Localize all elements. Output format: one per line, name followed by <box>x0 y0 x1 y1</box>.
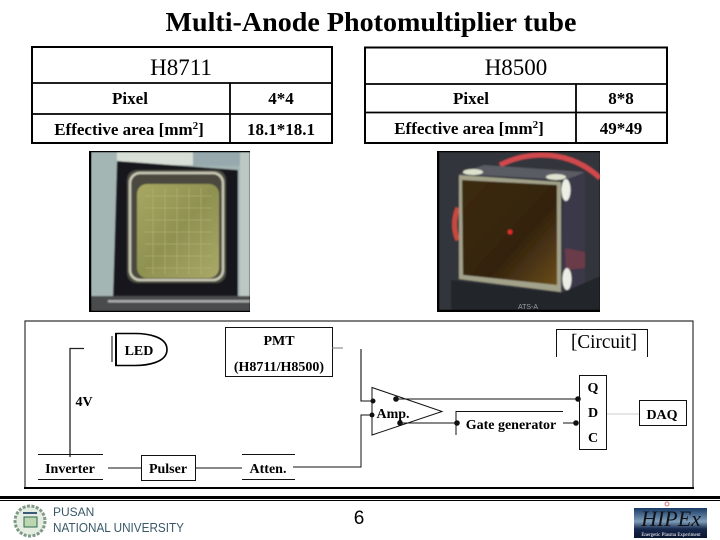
row: effective area: ] <box>198 120 204 139</box>
photo: H8500 tube <box>437 151 600 312</box>
box: flip-flop Q D C <box>575 376 606 450</box>
row: effective area: 2 <box>193 120 199 132</box>
box: inverter <box>38 454 103 480</box>
row: pixel <box>112 89 294 108</box>
label: circuit <box>556 330 648 357</box>
row: effective area: 18.1*18.1 <box>247 120 315 139</box>
box: DAQ: DAQ <box>646 408 678 423</box>
box: PMT: (H8711/H8500) <box>234 360 324 375</box>
footer rule <box>0 496 720 499</box>
page number: 6 <box>354 508 364 529</box>
amplifier <box>370 388 442 435</box>
row: pixel: Pixel <box>112 89 148 108</box>
table: H8711 <box>32 47 332 143</box>
row: effective area: Effective area [mm <box>54 120 193 139</box>
box: flip-flop Q D C: D <box>588 406 598 421</box>
row: effective area: ] <box>538 119 544 138</box>
box: PMT: PMT <box>263 334 295 349</box>
logo: HIPEx: HIPEx <box>640 506 701 531</box>
logo: HIPEx <box>634 502 707 538</box>
amplifier: Amp. <box>376 407 410 422</box>
logo: Pusan National University: PUSAN <box>53 505 94 519</box>
box: PMT <box>226 328 332 376</box>
row: pixel <box>453 89 634 108</box>
title: Multi-Anode Photomultiplier tube <box>166 7 577 37</box>
row: pixel: 8*8 <box>608 89 634 108</box>
logo: Pusan National University: NATIONAL UNIVERSITY <box>53 521 185 535</box>
logo: HIPEx: Energetic Plasma Experiment <box>641 533 701 538</box>
red cable <box>500 155 600 178</box>
photo: H8711 tube <box>89 151 250 312</box>
box: atten: Atten. <box>250 462 286 477</box>
wire: inverter to LED <box>70 348 84 457</box>
gate generator: Gate generator <box>466 418 556 433</box>
box: pulser <box>142 456 196 480</box>
box: inverter: Inverter <box>45 462 95 477</box>
gate generator <box>454 412 563 435</box>
icon: LED <box>112 333 167 366</box>
row: effective area: 49*49 <box>600 119 642 138</box>
wire: inverter to pulser <box>108 467 141 469</box>
row: effective area <box>394 119 642 138</box>
label: 4V: 4V <box>75 395 93 410</box>
box: flip-flop Q D C: Q <box>588 381 599 396</box>
wire: amp to gate generator <box>400 422 457 424</box>
row: effective area: 2 <box>533 119 539 131</box>
box: flip-flop Q D C: C <box>588 431 598 446</box>
table: H8500 <box>365 48 667 143</box>
label: circuit: [Circuit] <box>571 331 637 353</box>
wire: amp to Q <box>396 398 578 400</box>
box: pulser: Pulser <box>149 462 187 477</box>
box: atten <box>242 454 295 480</box>
table heading: H8711: H8711 <box>150 55 212 80</box>
row: effective area: Effective area [mm <box>394 119 533 138</box>
wire: atten to amp <box>293 415 372 467</box>
photo: H8500 tube: ATS-A <box>518 304 538 311</box>
logo: Pusan National University <box>15 505 185 536</box>
wire: PMT to amp <box>361 349 372 401</box>
icon: university seal <box>15 506 45 536</box>
icon: LED: LED <box>125 344 153 359</box>
box: DAQ <box>640 400 686 426</box>
row: pixel: 4*4 <box>268 89 294 108</box>
wire: pulser to atten <box>196 467 242 469</box>
panel: circuit diagram <box>24 321 694 488</box>
row: pixel: Pixel <box>453 89 489 108</box>
table heading: H8500: H8500 <box>485 55 547 80</box>
row: effective area <box>54 120 315 139</box>
